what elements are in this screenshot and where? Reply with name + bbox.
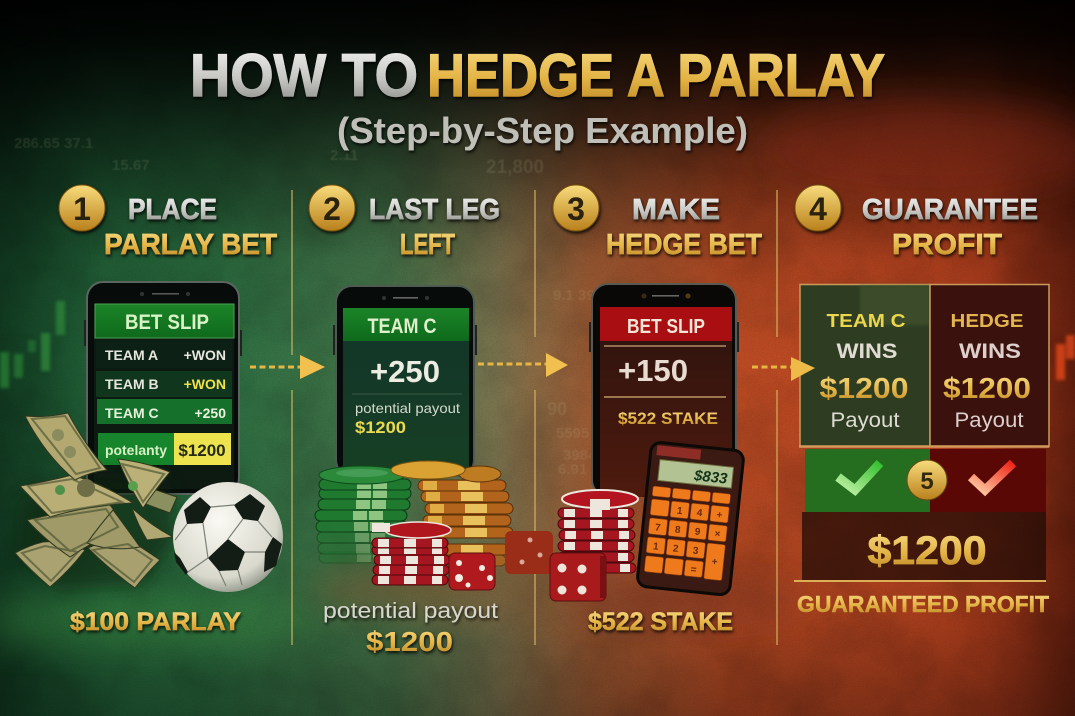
step 4 heading: 4	[809, 191, 827, 227]
step 2 heading: LEFT	[400, 229, 455, 261]
step 1 heading: 1	[73, 191, 91, 227]
hedge wins cell	[930, 284, 1049, 446]
row: team B: +WON	[184, 376, 226, 392]
calculator key labels: 8	[674, 525, 681, 536]
phone: parlay bet slip	[84, 282, 242, 494]
odds	[604, 346, 726, 397]
phone: hedge bet slip	[589, 284, 739, 497]
row: team C: TEAM C	[105, 405, 159, 421]
calculator key labels: ×	[714, 529, 721, 540]
potential payout text: potential payout	[355, 400, 460, 416]
odds: +250	[370, 354, 440, 389]
calculator key labels: +	[716, 510, 723, 521]
row: team C: +250	[194, 405, 226, 421]
potential payout text	[352, 394, 462, 437]
red header	[600, 307, 732, 341]
stake: $522 STAKE	[618, 409, 718, 428]
faint background numbers: 21,800	[486, 157, 544, 178]
label: potential payout: $1200	[366, 626, 453, 657]
step 4 heading	[795, 185, 1038, 261]
guaranteed amount	[802, 512, 1046, 580]
calculator key labels: 9	[694, 527, 701, 538]
team C wins cell: Payout	[830, 409, 900, 432]
row: team A: TEAM A	[105, 347, 158, 363]
row: team A	[96, 340, 232, 368]
step 2 heading: LAST LEG	[369, 194, 500, 226]
calculator key labels	[650, 504, 723, 578]
row: team B	[96, 371, 232, 397]
team C wins cell: TEAM C	[826, 310, 906, 331]
icon: gold chip stack	[391, 461, 513, 566]
red check band	[930, 449, 1046, 512]
step 1 heading: PARLAY BET	[104, 229, 277, 261]
faint background numbers: 6.91	[558, 461, 587, 478]
icon: red die	[550, 553, 606, 601]
team C header: TEAM C	[368, 315, 436, 338]
step 3 heading: 3	[567, 191, 585, 227]
icon: soccer ball	[173, 482, 283, 592]
calculator key labels: +	[711, 557, 718, 568]
icon: red dice pair	[449, 531, 553, 590]
icon: money pile	[15, 413, 177, 590]
potential payout bar: potelanty	[105, 443, 167, 458]
row: team A: +WON	[184, 347, 226, 363]
step 2 heading	[309, 185, 500, 261]
hedge wins cell: WINS	[959, 340, 1021, 363]
row: team B: TEAM B	[105, 376, 159, 392]
label: hedge stake: $522 STAKE	[588, 608, 733, 636]
step 4 heading: PROFIT	[892, 229, 1002, 261]
hedge wins cell: $1200	[943, 373, 1031, 405]
bet slip header	[95, 304, 234, 338]
arrow: step 3 to 4	[752, 357, 815, 381]
faint background numbers: 9.1 39%	[553, 287, 608, 304]
faint background numbers: 286.65 37.1	[14, 135, 93, 152]
label: potential payout: potential payout	[323, 598, 498, 623]
step 3 heading	[553, 185, 762, 261]
faint background numbers: 2.11	[330, 147, 358, 164]
team C wins cell: $1200	[820, 373, 908, 405]
team C header	[343, 308, 469, 341]
red header: BET SLIP	[627, 316, 705, 338]
bet slip header: BET SLIP	[125, 311, 209, 334]
faint background numbers: 55951	[556, 425, 598, 442]
team C wins cell: WINS	[836, 340, 898, 363]
step 2 heading: 2	[323, 191, 341, 227]
potential payout bar	[98, 433, 231, 465]
icon: calculator	[637, 442, 744, 596]
step 1 heading	[59, 185, 277, 261]
step 3 heading: HEDGE BET	[606, 229, 762, 261]
icon: red chip stack	[372, 522, 451, 585]
potential payout bar: $1200	[178, 441, 226, 460]
hedge wins cell: Payout	[954, 409, 1024, 432]
arrow: step 1 to 2	[250, 355, 325, 379]
calculator key labels: 4	[696, 508, 703, 519]
faint market chart candles	[0, 301, 1075, 388]
arrow: step 2 to 3	[478, 353, 568, 377]
title: HEDGE A PARLAY	[427, 42, 885, 109]
potential payout text: $1200	[355, 419, 406, 437]
green check band	[805, 449, 930, 512]
badge 5: 5	[920, 468, 934, 495]
step dividers	[292, 190, 777, 645]
phone: last leg	[333, 286, 477, 476]
team C wins cell	[800, 284, 930, 446]
calculator keys	[644, 486, 731, 581]
icon: red chip stack 2	[558, 490, 638, 573]
title	[190, 42, 885, 109]
calculator key labels: 2	[672, 543, 679, 555]
step 4 heading: GUARANTEE	[862, 194, 1038, 226]
calculator display: $833	[692, 467, 729, 488]
title: HOW TO	[190, 42, 418, 109]
faint background numbers: 3984	[563, 447, 597, 464]
row: team C	[97, 399, 232, 424]
label: parlay stake: $100 PARLAY	[70, 608, 241, 636]
faint background numbers: 15.67	[112, 157, 150, 174]
calculator key labels: =	[690, 564, 697, 576]
faint background numbers	[14, 135, 608, 478]
faint background numbers: 90	[547, 399, 567, 419]
calculator display	[658, 460, 734, 488]
calculator key labels: 1	[676, 506, 683, 517]
icon: green chip stack	[315, 466, 411, 563]
panel: guaranteed outcomes	[794, 284, 1049, 617]
step 3 heading: MAKE	[632, 194, 720, 226]
hedge wins cell: HEDGE	[950, 310, 1024, 331]
guaranteed amount: $1200	[868, 529, 986, 573]
guaranteed profit label: GUARANTEED PROFIT	[797, 591, 1049, 617]
calculator key labels: 1	[652, 541, 660, 553]
calculator key labels: 3	[692, 546, 699, 557]
calculator key labels: 7	[654, 522, 662, 534]
badge 5	[907, 460, 947, 500]
subtitle: (Step-by-Step Example)	[337, 110, 748, 151]
label: potential payout	[323, 598, 498, 657]
step 1 heading: PLACE	[128, 194, 217, 226]
odds: +150	[618, 353, 688, 388]
